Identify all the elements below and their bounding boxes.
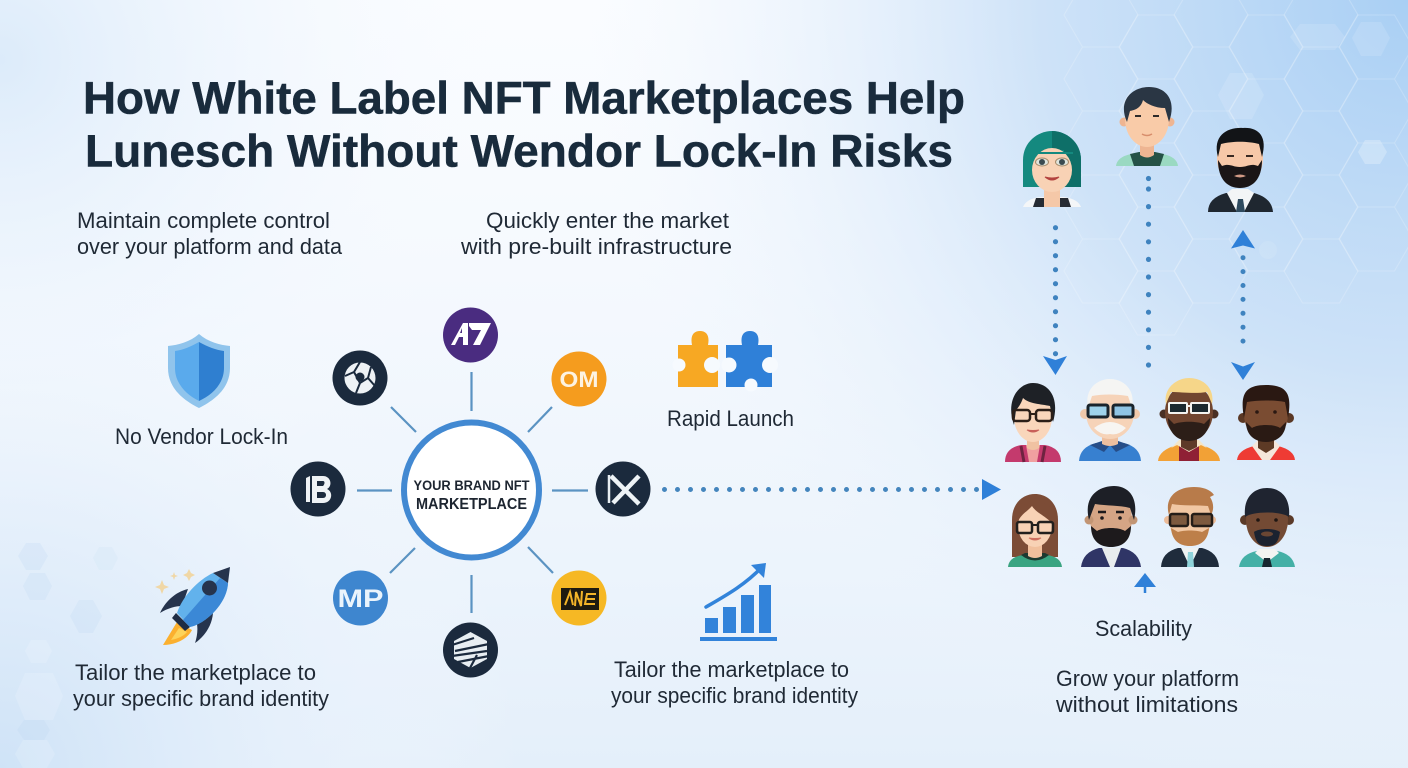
logo: B [290,462,346,516]
text: right brand identity: your specific brand identity [611,683,858,708]
arrow: two-way top right [1231,230,1255,380]
logo: OM [552,352,606,406]
logo: stripes [443,622,498,678]
text: platform control: Maintain complete control [77,208,330,233]
logo: ball [332,350,388,406]
spokes [357,372,588,613]
hub and spokes diagram [290,308,650,678]
logo: OM: OM [560,367,598,392]
arrow: top middle user dotted line [1146,178,1151,368]
title: Lunesch Without Wendor Lock-In Risks [85,126,953,176]
avatar: top green shirt man [1116,87,1178,166]
icon: growth chart [700,563,777,641]
avatar: woman with glasses pink top [1005,383,1061,462]
avatar: top teal hair woman [1023,131,1081,207]
text: growth: Grow your platform [1056,666,1239,691]
center circle: MARKETPLACE [416,496,527,513]
label: scalability: Scalability [1095,616,1192,641]
center circle [404,422,539,558]
text: right brand identity: Tailor the marketplace to [614,657,849,682]
logo: MP: MP [338,585,384,613]
avatar: bearded man navy suit [1081,486,1141,567]
title: How White Label NFT Marketplaces Help [83,72,965,124]
text: platform control [77,208,343,259]
arrow: top left user down [1043,228,1067,375]
arrow: scalability up [1134,573,1156,593]
avatar: top bearded man [1208,128,1273,212]
logo: X [596,462,650,516]
text: right brand identity [611,657,858,708]
center circle: YOUR BRAND NFT [414,478,530,493]
logo: ANS [552,570,606,626]
logo: AN7 [443,308,498,362]
label: rapid launch: Rapid Launch [667,406,794,431]
text: platform control: over your platform and data [77,234,343,259]
icon: shield [168,334,230,408]
label: no vendor lock-in: No Vendor Lock-In [115,424,288,449]
avatar: dark man teal shirt [1239,488,1295,567]
avatar: dark man blond hair shades [1158,378,1220,461]
avatar: older man white hair [1079,379,1141,461]
text: left brand identity [73,660,329,711]
text: left brand identity: your specific brand identity [73,686,329,711]
avatar: brown hair woman glasses [1008,494,1062,567]
text: market entry [460,208,732,259]
avatar: ginger beard man glasses [1161,487,1219,567]
text: market entry: Quickly enter the market [486,208,729,233]
text: market entry: with pre-built infrastructure [460,234,732,259]
text: growth [1055,666,1239,717]
icon: rocket [155,567,230,645]
text: left brand identity: Tailor the marketplace to [75,660,316,685]
arrow: hub to users [664,479,1001,500]
text: growth: without limitations [1055,692,1238,717]
avatar: dark man red shirt [1237,385,1295,460]
logo: MP [333,570,388,626]
title [83,72,965,176]
icon: puzzle pieces [672,331,778,392]
